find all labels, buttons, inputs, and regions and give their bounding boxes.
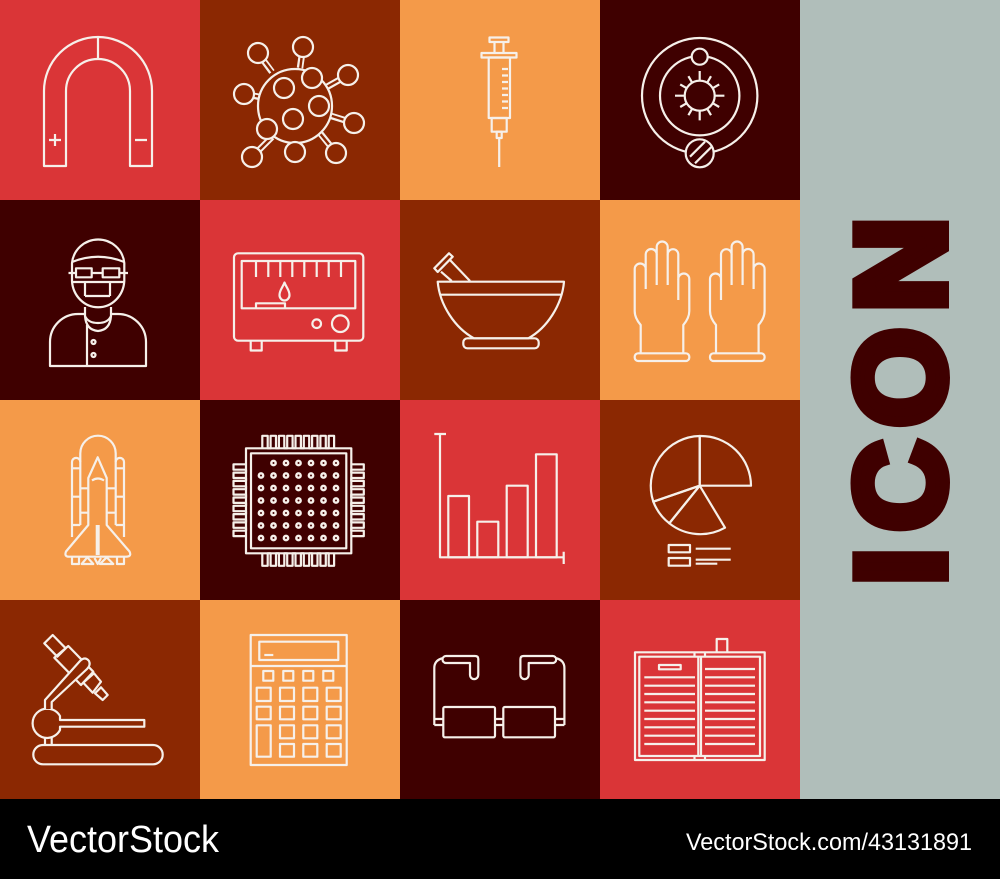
panel: space shuttle tile xyxy=(0,400,200,600)
title: ICON: C xyxy=(830,440,971,532)
panel: mortar tile xyxy=(400,200,600,400)
panel: surgeon tile xyxy=(0,200,200,400)
panel: gloves tile xyxy=(600,200,800,400)
icon: processor chip xyxy=(234,436,364,566)
title: ICON: O xyxy=(830,328,971,427)
icon: open book xyxy=(635,639,765,760)
panel: side bar with title xyxy=(800,0,1000,799)
footer bar xyxy=(0,799,1000,879)
panel: open book tile xyxy=(600,600,800,799)
panel: glasses tile xyxy=(400,600,600,799)
icon: horseshoe magnet xyxy=(44,37,152,166)
panel: solar orbit tile xyxy=(600,0,800,200)
panel: pie chart tile xyxy=(600,400,800,600)
icon: safety glasses xyxy=(434,656,564,737)
title: ICON: I xyxy=(830,548,971,585)
icon: microscope xyxy=(33,635,163,764)
icon: mortar and pestle xyxy=(434,253,564,348)
title: ICON xyxy=(830,217,971,585)
panel: processor tile xyxy=(200,400,400,600)
icon: syringe xyxy=(482,38,516,167)
panel: microscope tile xyxy=(0,600,200,799)
icon: bar chart xyxy=(434,434,564,564)
panel: bar chart tile xyxy=(400,400,600,600)
watermark logo text: VectorStock xyxy=(27,819,220,861)
icon: doctor in mask xyxy=(50,240,146,366)
panel: gauge tile xyxy=(200,200,400,400)
icon: measuring device with flame xyxy=(234,253,363,350)
watermark image id: VectorStock.com/43131891 xyxy=(686,829,972,856)
icon: virus xyxy=(234,37,364,167)
title: ICON: N xyxy=(831,217,971,312)
panel: syringe tile xyxy=(400,0,600,200)
icon: pie chart with legend xyxy=(651,436,751,566)
panel: calculator tile xyxy=(200,600,400,799)
panel: virus tile xyxy=(200,0,400,200)
icon: pair of gloves xyxy=(635,242,765,361)
icon: calculator xyxy=(251,635,347,765)
panel: magnet tile xyxy=(0,0,200,200)
icon: space shuttle xyxy=(65,436,130,564)
icon: orbit with sun and pill xyxy=(642,38,757,167)
